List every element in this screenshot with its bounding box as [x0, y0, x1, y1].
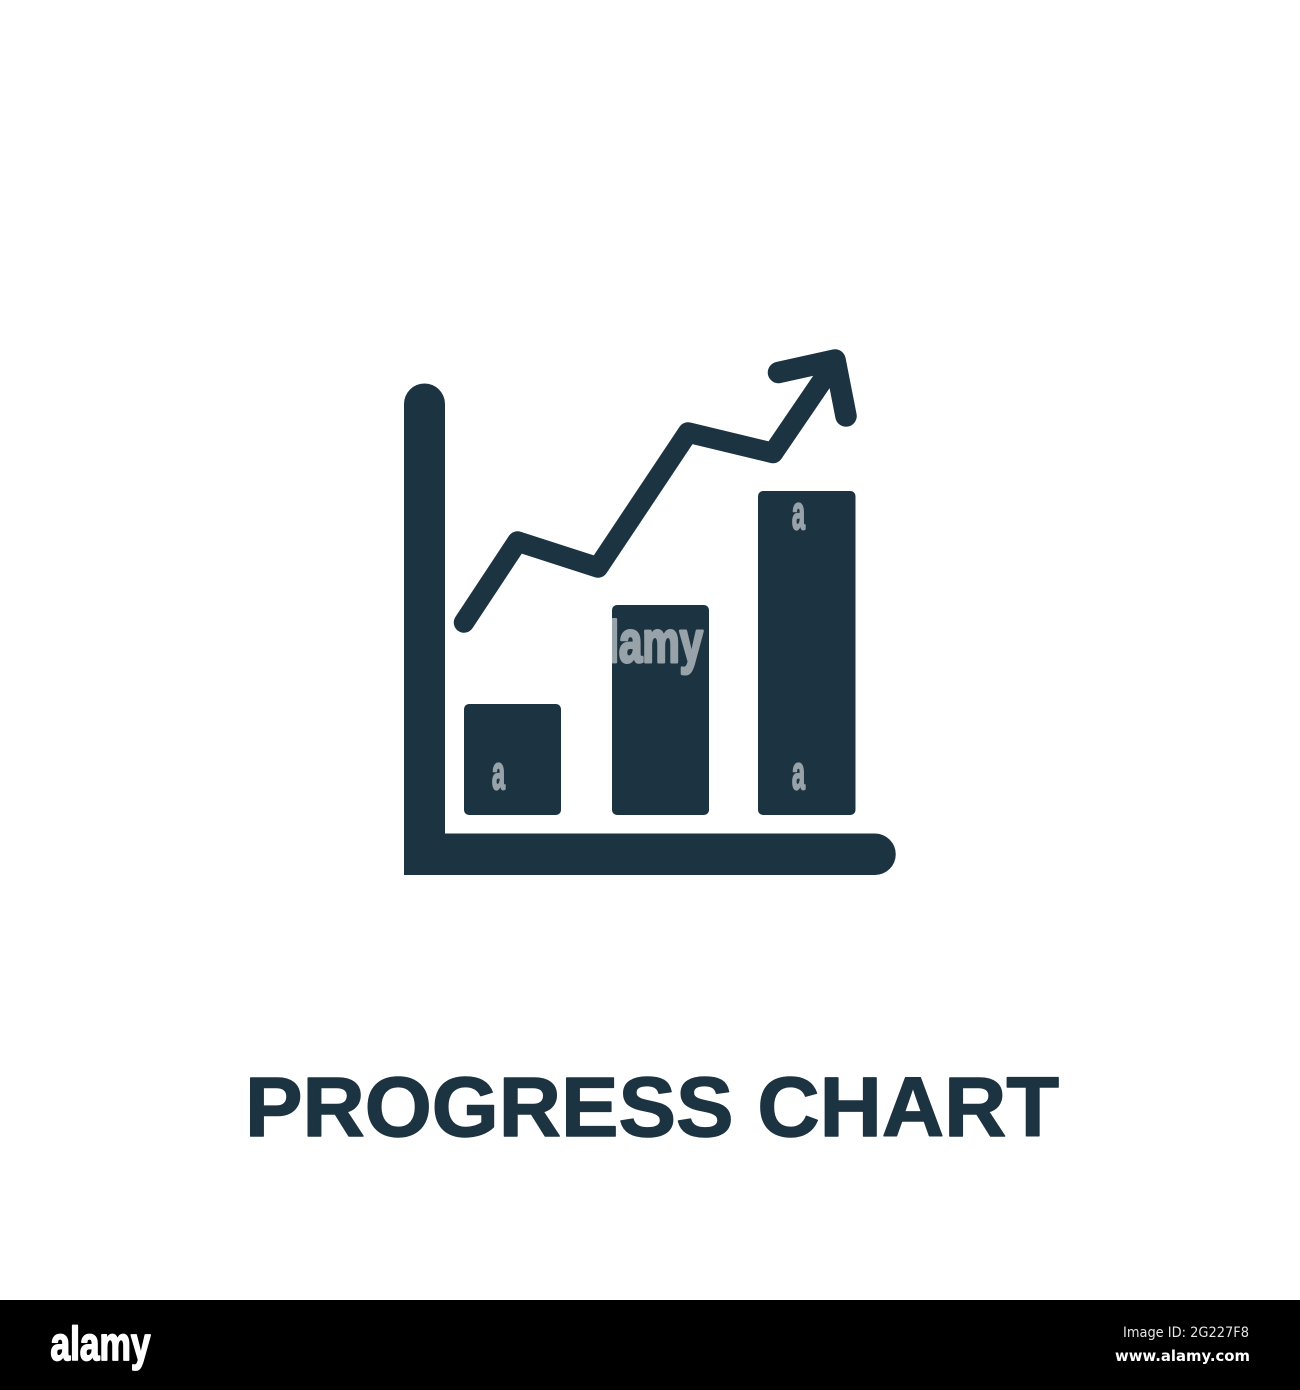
footer logo: alamy	[50, 1317, 150, 1370]
bar 1: a	[492, 746, 505, 799]
image id: Image ID: 2G227F8	[1123, 1325, 1249, 1341]
rising trend line with arrow	[464, 360, 846, 622]
bar 3: a	[792, 486, 805, 539]
bar 3: a	[792, 746, 805, 799]
bar 2: alamy	[584, 610, 703, 675]
bar 1	[464, 704, 561, 815]
title: PROGRESS CHART	[245, 1060, 1059, 1154]
bar 3	[758, 486, 856, 815]
footer bar	[0, 1300, 1300, 1390]
bar 2	[612, 605, 709, 815]
website: www.alamy.com	[1115, 1347, 1250, 1365]
chart axes	[404, 383, 896, 875]
icon: progress chart	[404, 360, 896, 875]
